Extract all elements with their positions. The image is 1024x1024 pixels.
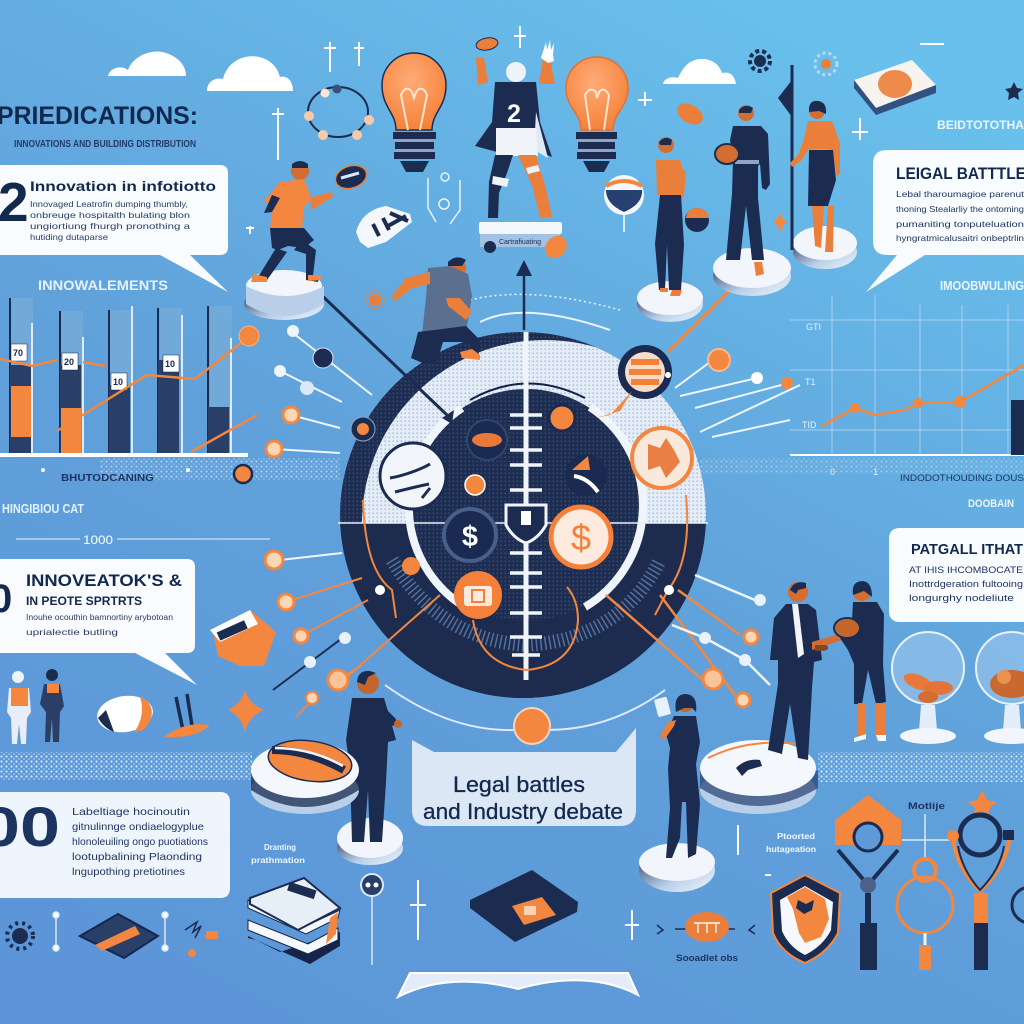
radial pointers: upper right (675, 362, 800, 437)
callout: legal battles and industry debate: Legal battles (453, 772, 585, 797)
callout: legal battles and industry debate (412, 728, 636, 826)
lower guide arcs (385, 685, 665, 744)
heading: top right small: BEIDTOTOTHA (937, 118, 1024, 132)
radial nodes: upper left (234, 325, 375, 483)
heading: dooban: DOOBAIN (968, 498, 1014, 510)
radial pointers: lower right (606, 575, 770, 695)
player: standing with ball, right of bulb (637, 137, 703, 322)
bulb: left (382, 53, 446, 172)
text block: highlight cat: 1000 (83, 533, 113, 547)
callout: innovation in infotech: ungiortiung fhurgh pronothing a (30, 221, 190, 231)
icon: orange flower (815, 53, 837, 75)
icon: football small with caption (657, 912, 755, 963)
ring of beads icon (304, 84, 374, 140)
icon: football and goal (95, 692, 210, 737)
callout: innovators and sports: uprialectie butling (26, 628, 118, 637)
caption: note under callout (766, 832, 816, 854)
callout: innovators and sports (0, 559, 197, 685)
bar chart: innovalements (0, 277, 259, 484)
callout: labelling predictions: lootupbalining Plaonding (72, 851, 202, 863)
bar chart: innovalements: 20 (64, 357, 74, 367)
badge: dollar dark: $ (462, 521, 478, 553)
spine laces (506, 332, 546, 680)
icon: legal tool scales: Motlije (908, 801, 945, 811)
callout: legal battle (866, 150, 1024, 292)
bar chart: innovalements: 10 (165, 359, 175, 369)
dish: right lower (700, 740, 818, 814)
callout: innovation in infotech (0, 165, 228, 292)
players: handshake pair (768, 581, 886, 760)
player: lunging at ball top (392, 257, 480, 364)
icon: glass orb with food right (976, 632, 1024, 744)
icon: helmet (356, 206, 412, 248)
caption: book note (251, 843, 305, 865)
clouds (108, 52, 736, 91)
icon: shield (771, 875, 840, 963)
callout: innovation in infotech: hutiding dutaparse (30, 232, 108, 242)
icon: football medallion right (604, 175, 644, 232)
radial nodes: upper right (665, 349, 793, 389)
icon: open book with tablet (398, 870, 638, 997)
callout: innovation in infotech: Innovaged Leatrofin dumping thumbly, (30, 199, 188, 209)
arrow: up (516, 260, 532, 330)
callout: legal battle: Lebal tharoumagioe parenut (896, 189, 1024, 199)
player: quarterback on pedestal (475, 36, 571, 263)
icon: tilted orange diamond (80, 914, 158, 958)
icon: play diagram (428, 173, 460, 224)
callout: labelling predictions (0, 792, 230, 898)
radial pointers: lower left (273, 553, 440, 717)
icon: football on dish (251, 735, 359, 814)
player: quarterback on pedestal: Cartrafiuating (499, 239, 541, 246)
radial nodes: lower right (664, 585, 766, 707)
radial pointers: upper left (274, 333, 372, 453)
bulb: right (566, 57, 628, 172)
callout: legal battles and industry debate: and Industry debate (423, 799, 623, 824)
small players group (7, 669, 64, 744)
callout: labelling predictions: hlonoleuiling ongo puotiations (72, 836, 208, 848)
caption: note under callout: hutageation (766, 845, 816, 854)
line chart: right: 0 (830, 467, 835, 477)
callout: innovators and sports: INNOVEATOK'S & (26, 571, 182, 590)
caption: note under callout: Ptoorted (777, 832, 815, 841)
icon: leaf orange (673, 99, 707, 129)
badge: orange creature (632, 428, 692, 488)
icon: navy star (1005, 82, 1023, 100)
dotted horizontal bands (0, 458, 1024, 782)
callout: legal battle: thoning Stealarliy the ontoming (896, 204, 1024, 214)
pin markers (53, 912, 168, 951)
badge: dollar orange: $ (571, 517, 591, 558)
text block: highlight cat (2, 501, 270, 547)
orange pointer by burger (596, 391, 632, 418)
callout: labelling predictions: lngupothing pretiotines (72, 866, 185, 878)
callout: patgall: Inottrdgeration fultooing (909, 579, 1023, 589)
icon: gear virus (7, 923, 33, 949)
callout: innovators and sports: IN PEOTE SPRTRTS (26, 594, 142, 608)
sphere: central football (338, 332, 728, 703)
badge: mascot (565, 454, 607, 496)
player: running at left (244, 161, 334, 320)
badge: burger (618, 345, 672, 399)
icon: glass orb with food left (892, 632, 964, 744)
player: quarterback on pedestal: 2 (507, 100, 521, 128)
callout: innovation in infotech: onbreuge hospitalth bulating blon (30, 210, 190, 220)
line chart: right: T1 (805, 377, 816, 387)
sparkle ticks (246, 26, 944, 234)
player: man in suit (337, 671, 403, 865)
pin: round badge (361, 874, 383, 965)
callout: innovators and sports: Inouhe ocouthin bamnortiny arybotoan (26, 613, 173, 622)
bar chart: innovalements: INNOWALEMENTS (38, 277, 168, 293)
line chart: right (790, 278, 1024, 483)
callout: patgall: PATGALL ITHAT (911, 541, 1023, 558)
caption: book note: Dranting (264, 843, 296, 852)
line chart: right: INDODOTHOUDING DOUS (900, 473, 1024, 483)
badge: football top (467, 420, 507, 460)
icon: small orange star (773, 212, 788, 233)
title: INNOVATIONS AND BUILDING DISTRIBUTION (14, 139, 196, 150)
orange play arcs (363, 495, 687, 670)
icon: jersey card (210, 610, 276, 666)
upper guide arc (470, 294, 620, 330)
caption: book note: prathmation (251, 856, 305, 865)
card: isometric tile (854, 60, 936, 115)
icon: ball beside player (685, 208, 709, 232)
icon: scribble and sparks (185, 922, 218, 957)
player: woman in black with tablet (639, 694, 715, 892)
badge: small orange top (549, 405, 575, 431)
callout: innovation in infotech: Innovation in infotiotto (30, 178, 216, 194)
bar chart: innovalements: 10 (113, 377, 123, 387)
badge: dollar dark (444, 509, 496, 561)
callout: labelling predictions: Labeltiage hocinoutin (72, 806, 190, 818)
badge: small orange (465, 475, 485, 495)
callout: patgall (889, 528, 1024, 622)
line chart: right: GTI (806, 322, 821, 332)
icon: book stack (248, 878, 340, 964)
title: PRIEDICATIONS: (0, 102, 198, 130)
callout: patgall: AT IHIS IHCOMBOCATE (909, 565, 1023, 575)
player: man holding ball (713, 105, 791, 296)
badge: whistle (380, 443, 446, 509)
badge: dollar orange (551, 507, 611, 567)
player: woman with flag (778, 65, 857, 269)
title (0, 102, 198, 150)
line chart: right: 1 (873, 467, 878, 477)
small tick decorations (410, 825, 771, 940)
orange sash arrow (668, 275, 745, 352)
callout: legal battle: pumaniting tonputeluation (896, 219, 1024, 229)
diagonal navy line (313, 287, 454, 424)
line chart: right: TID (802, 420, 817, 430)
icon: orange small flower (366, 291, 384, 309)
callout: labelling predictions: gitnulinnge ondiaelogyplue (72, 821, 204, 833)
radial nodes: lower left (265, 551, 420, 704)
icon: football small with caption: Sooadlet obs (676, 953, 738, 963)
icon: legal tool scales (835, 790, 1024, 970)
icon: football dark (332, 162, 370, 192)
callout: patgall: longurghy nodeliute (909, 593, 1014, 603)
text block: highlight cat: HINGIBIOU CAT (2, 501, 84, 516)
icon: orange sparkle (228, 690, 264, 732)
bar chart: innovalements: BHUTODCANING (61, 473, 154, 484)
icon: gear top (750, 51, 770, 71)
callout: legal battle: hyngratmicalusaitri onbeptrlin (896, 233, 1024, 243)
badge: orange camera (454, 571, 502, 619)
bar chart: innovalements: 70 (13, 348, 23, 358)
